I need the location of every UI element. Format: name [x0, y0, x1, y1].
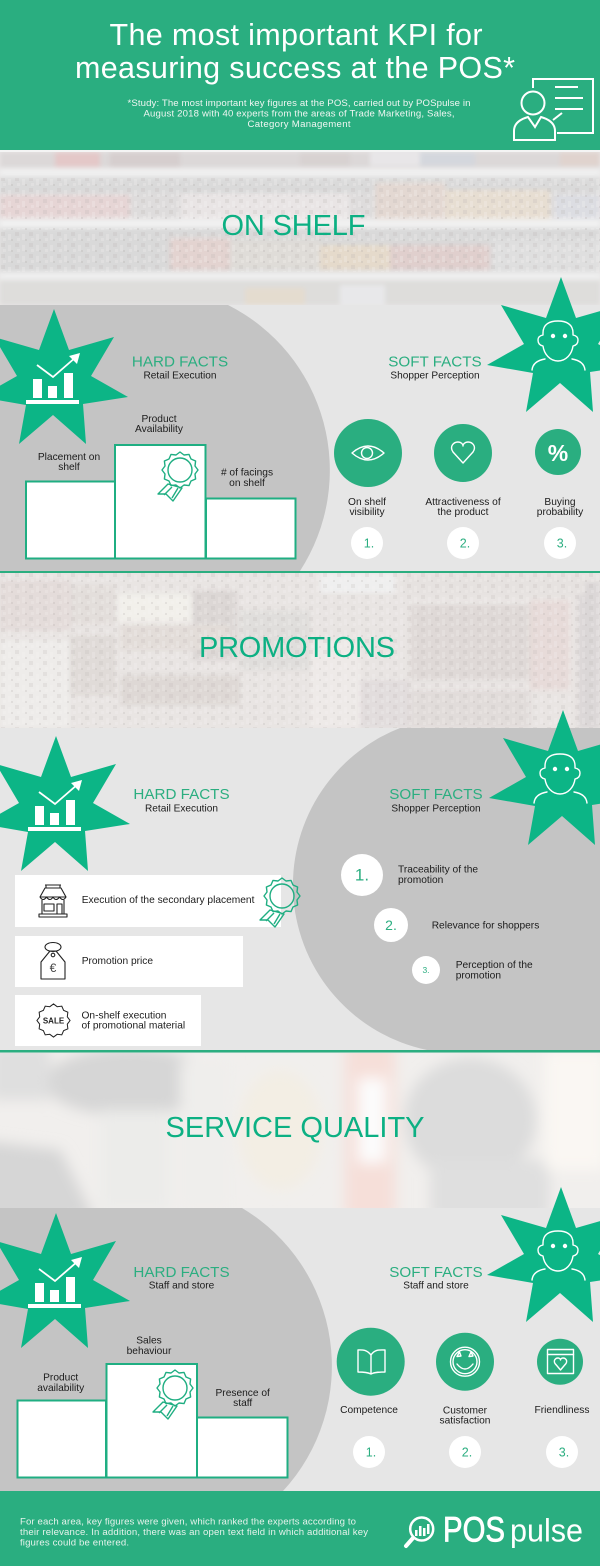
kpi labels: Buying [544, 497, 576, 508]
icon: shop [39, 885, 67, 917]
kpi circles [334, 419, 581, 487]
icon: price tag: € [50, 961, 57, 975]
gray half circle [293, 728, 600, 1050]
star: soft facts [489, 710, 600, 845]
section title: promotions: PROMOTIONS [199, 632, 395, 664]
podium labels: on shelf [229, 478, 265, 489]
heading: soft facts: Shopper Perception [390, 370, 480, 382]
podium labels: Placement on [38, 452, 100, 463]
heading: hard facts: Retail Execution [144, 370, 216, 382]
header band [0, 0, 600, 152]
study note [128, 98, 470, 130]
kpi labels: satisfaction [440, 1416, 490, 1426]
heading: soft facts [388, 354, 482, 382]
icon: rosette [260, 878, 300, 927]
kpi labels: probability [537, 507, 584, 518]
star: hard facts [0, 309, 128, 444]
footer note: figures could be entered. [20, 1538, 129, 1548]
section title: service quality: SERVICE QUALITY [166, 1112, 424, 1144]
rank badges: 2. [462, 1446, 472, 1460]
heading: hard facts: HARD FACTS [133, 1264, 230, 1281]
icon: price tag [41, 942, 65, 979]
ranking 2: Relevance for shoppers [432, 920, 539, 932]
kpi labels [340, 1405, 589, 1426]
footer note: their relevance. In addition, there was an open text field in which additional key [20, 1527, 368, 1538]
rank badges: 1. [364, 536, 374, 550]
logo: POSpulse [406, 1511, 583, 1550]
list item: promotion price: Promotion price [82, 956, 153, 967]
title [75, 18, 515, 85]
rank badges [351, 527, 576, 559]
study note: August 2018 with 40 experts from the areas of Trade Marketing, Sales, [144, 108, 454, 120]
kpi labels: On shelf [348, 497, 386, 508]
heading: hard facts: HARD FACTS [133, 786, 230, 803]
panel: on shelf [0, 277, 600, 571]
kpi labels [348, 497, 584, 518]
ranking 3: promotion [456, 970, 501, 982]
podium labels: shelf [58, 462, 80, 473]
icon: rosette [158, 452, 198, 501]
podium labels: Product [141, 414, 177, 425]
list item: promotion price [15, 936, 243, 987]
kpi labels: Attractiveness of [425, 497, 501, 508]
heading: soft facts [389, 786, 483, 815]
podium labels [37, 1336, 270, 1409]
gray half circle [0, 1208, 332, 1491]
podium labels: # of facings [221, 468, 273, 478]
podium labels: behaviour [127, 1346, 172, 1357]
icon: heart [452, 442, 474, 463]
ranking 2 [374, 908, 539, 942]
heading: soft facts: SOFT FACTS [388, 354, 482, 370]
footer note: For each area, key figures were given, which ranked the experts according to [20, 1516, 356, 1528]
icon: presenter with board [514, 79, 593, 140]
footer band [0, 1491, 600, 1566]
list item: promotional material: On-shelf execution [82, 1010, 166, 1022]
icon: eye [352, 446, 384, 460]
ranking 3: 3. [422, 965, 430, 975]
ranking 3: Perception of the [456, 960, 533, 971]
photo band: service quality [0, 1053, 600, 1208]
ranking 1: promotion [398, 875, 443, 886]
podium labels: staff [233, 1398, 252, 1409]
heading: soft facts: Staff and store [403, 1281, 469, 1292]
footer note [20, 1516, 368, 1548]
ranking 2: 2. [385, 917, 397, 933]
star: soft facts [487, 1187, 600, 1322]
star: soft facts [487, 277, 600, 412]
icon: percent: % [548, 440, 568, 466]
heading: soft facts: SOFT FACTS [389, 786, 483, 803]
panel: service quality [0, 1187, 600, 1491]
podium labels: Presence of [216, 1388, 270, 1399]
heading: hard facts [132, 354, 228, 382]
title: The most important KPI for [110, 18, 482, 52]
icon: rosette [153, 1370, 193, 1419]
ranking 1: 1. [355, 866, 369, 884]
heading: soft facts [389, 1264, 483, 1292]
ranking 1: Traceability of the [398, 864, 478, 876]
heading: hard facts [133, 1264, 230, 1292]
panel: promotions [0, 710, 600, 1050]
kpi circles [337, 1328, 583, 1396]
podium labels: Sales [136, 1336, 162, 1346]
title: measuring success at the POS* [75, 51, 515, 85]
podium labels: Product [43, 1372, 78, 1384]
heading: hard facts [133, 786, 230, 815]
list item: promotional material [15, 995, 201, 1046]
heading: hard facts: Retail Execution [145, 804, 218, 815]
divider [0, 1050, 600, 1052]
podium labels: availability [37, 1383, 85, 1394]
icon: smiley [450, 1347, 480, 1376]
rank badges: 2. [460, 536, 470, 550]
gray half circle [0, 305, 330, 571]
photo band: promotions [0, 573, 600, 728]
icon: sale burst: SALE [43, 1016, 65, 1026]
podium labels [38, 414, 273, 489]
list item: secondary placement [15, 875, 281, 927]
section title: on shelf: ON SHELF [222, 210, 366, 242]
study note: Category Management [248, 119, 351, 130]
rank badges: 3. [557, 536, 567, 550]
star: hard facts [0, 1213, 130, 1348]
list item: promotional material: of promotional material [82, 1020, 185, 1032]
podium labels: Availability [135, 424, 184, 435]
rank badges [353, 1436, 578, 1468]
podium [18, 1336, 288, 1478]
star: hard facts [0, 736, 130, 871]
heading: hard facts: Staff and store [149, 1280, 215, 1292]
kpi labels: Friendliness [535, 1405, 589, 1416]
podium [26, 414, 296, 558]
kpi labels: Customer [443, 1406, 488, 1416]
divider [0, 571, 600, 574]
list item: secondary placement: Execution of the secondary placement [82, 895, 255, 906]
icon: browser heart [548, 1350, 574, 1374]
icon: sale burst [37, 1004, 70, 1037]
kpi labels: Competence [340, 1405, 398, 1416]
heading: soft facts: SOFT FACTS [389, 1264, 483, 1281]
kpi labels: the product [438, 507, 489, 518]
kpi labels: visibility [349, 507, 385, 518]
study note: *Study: The most important key figures at the POS, carried out by POSpulse in [128, 98, 470, 109]
logo: POSpulse: POS [443, 1511, 505, 1550]
heading: hard facts: HARD FACTS [132, 354, 228, 370]
logo: POSpulse: pulse [510, 1513, 583, 1549]
icon: book [358, 1350, 385, 1374]
heading: soft facts: Shopper Perception [391, 804, 481, 815]
photo band: on shelf [0, 152, 600, 305]
rank badges: 3. [559, 1446, 569, 1460]
ranking 3 [412, 956, 533, 984]
rank badges: 1. [366, 1446, 376, 1460]
ranking 1 [341, 854, 478, 896]
